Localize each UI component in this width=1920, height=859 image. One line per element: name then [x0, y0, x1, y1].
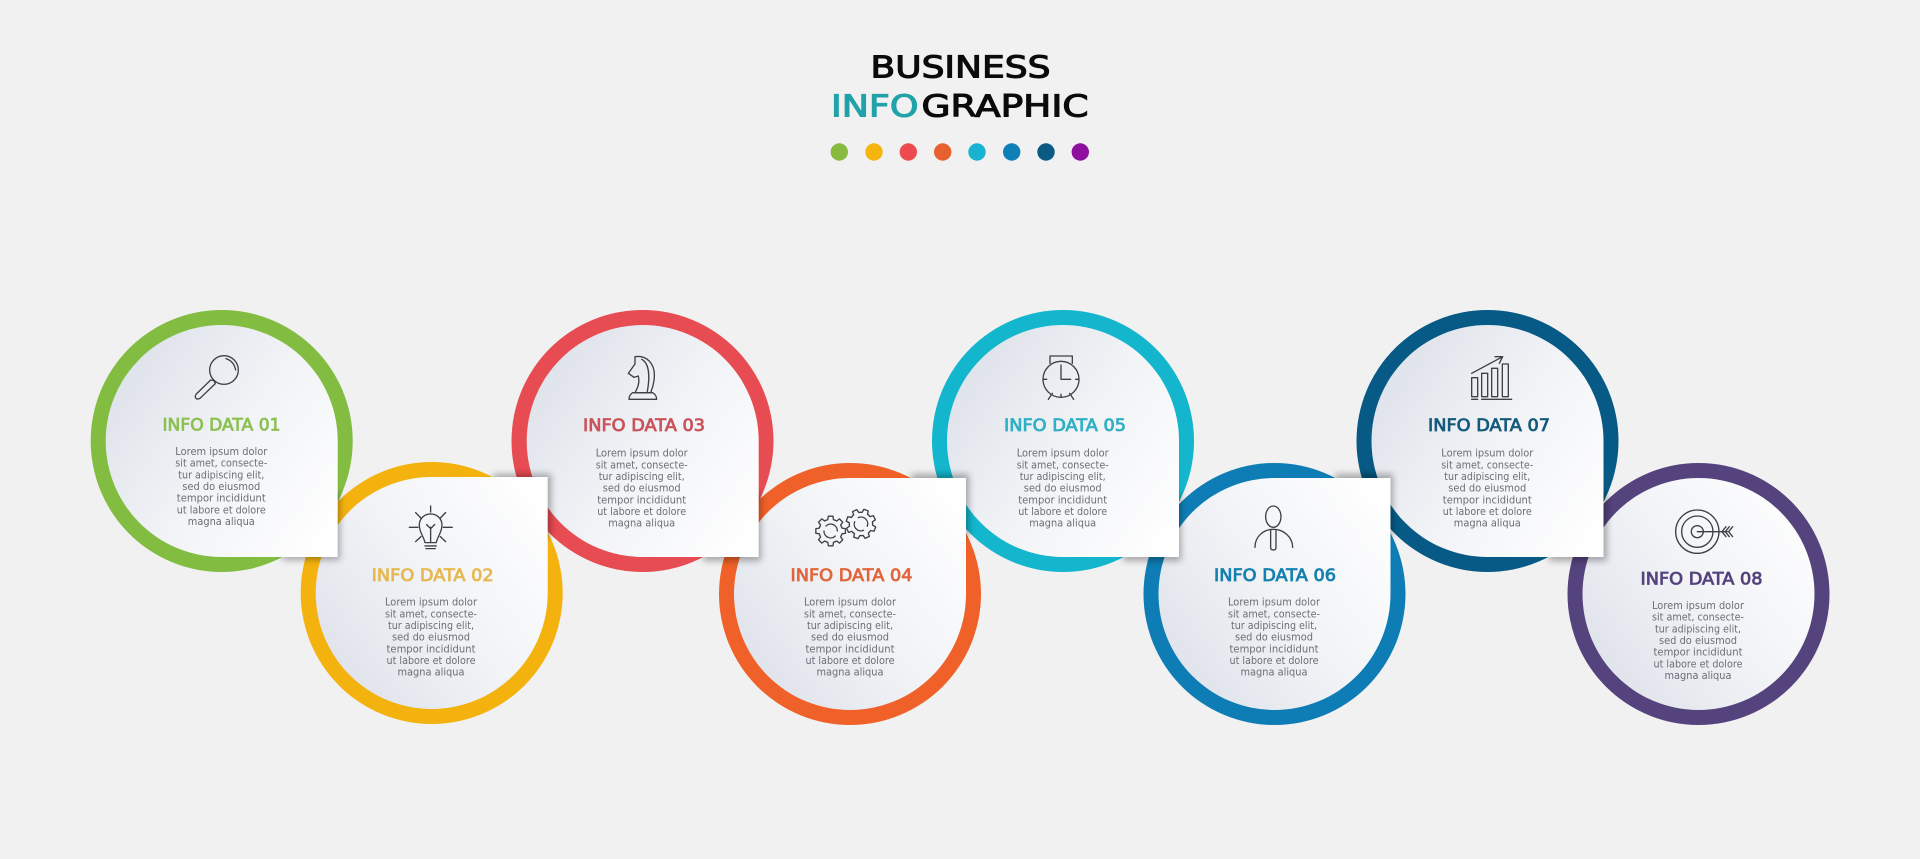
text block: Lorem ipsum dolor: [1228, 597, 1321, 609]
icon: target: [1676, 510, 1733, 553]
text block: sed do eiusmod: [182, 481, 260, 493]
text block: magna aliqua: [1029, 518, 1096, 530]
title: [831, 51, 1088, 125]
panel: info data 06: [1144, 463, 1406, 725]
panel: info data 08: [1568, 463, 1830, 725]
text block: tur adipiscing elit,: [178, 469, 264, 481]
heading: INFO DATA 02: [372, 566, 494, 586]
text block: ut labore et dolore: [1018, 506, 1107, 518]
text block: [1017, 448, 1109, 530]
icon: magnifying glass: [195, 356, 238, 399]
text block: sit amet, consecte-: [804, 608, 896, 620]
panel: info data 05: [932, 310, 1194, 572]
text block: tur adipiscing elit,: [1231, 620, 1317, 632]
text block: sed do eiusmod: [1448, 483, 1526, 495]
text block: tempor incididunt: [597, 494, 686, 506]
text block: sed do eiusmod: [811, 632, 889, 644]
text block: [596, 448, 688, 530]
text block: tur adipiscing elit,: [1020, 471, 1106, 483]
text block: magna aliqua: [1664, 670, 1732, 682]
title: BUSINESS: [870, 51, 1050, 86]
text block: sit amet, consecte-: [175, 458, 267, 470]
text block: [385, 597, 478, 679]
text block: ut labore et dolore: [177, 504, 266, 516]
text block: Lorem ipsum dolor: [1017, 448, 1109, 460]
text block: sit amet, consecte-: [1228, 608, 1320, 620]
text block: magna aliqua: [608, 518, 675, 530]
text block: ut labore et dolore: [1443, 506, 1532, 518]
text block: tempor incididunt: [806, 643, 894, 655]
panel: info data 03: [512, 310, 774, 572]
panel: info data 04: [719, 463, 981, 725]
title: INFO: [831, 90, 918, 125]
text block: magna aliqua: [816, 667, 884, 679]
icon: light bulb: [409, 506, 452, 549]
icon: alarm clock: [1043, 356, 1079, 399]
text block: Lorem ipsum dolor: [1441, 448, 1534, 460]
text block: Lorem ipsum dolor: [596, 448, 688, 460]
text block: [804, 597, 897, 679]
icon: person: [1255, 506, 1293, 550]
heading: INFO DATA 06: [1214, 566, 1336, 586]
text block: tur adipiscing elit,: [1655, 623, 1741, 635]
text block: [1441, 448, 1534, 530]
text block: sit amet, consecte-: [385, 608, 477, 620]
panel: info data 02: [301, 462, 563, 724]
title: GRAPHIC: [922, 90, 1088, 125]
text block: sit amet, consecte-: [596, 459, 688, 471]
text block: sit amet, consecte-: [1017, 459, 1109, 471]
heading: INFO DATA 08: [1640, 570, 1762, 590]
text block: tur adipiscing elit,: [388, 620, 474, 632]
icon: bar chart: [1472, 357, 1512, 399]
text block: sed do eiusmod: [1024, 483, 1102, 495]
text block: magna aliqua: [398, 667, 464, 679]
text block: sit amet, consecte-: [1652, 612, 1744, 624]
text block: ut labore et dolore: [597, 506, 686, 518]
colour dots row: [831, 143, 1089, 161]
panel: info data 07: [1356, 310, 1618, 572]
text block: sit amet, consecte-: [1441, 459, 1533, 471]
text block: tempor incididunt: [177, 493, 266, 505]
heading: INFO DATA 04: [790, 566, 912, 586]
text block: Lorem ipsum dolor: [175, 446, 268, 458]
text block: tempor incididunt: [1230, 643, 1318, 655]
text block: ut labore et dolore: [1654, 658, 1742, 670]
heading: INFO DATA 01: [162, 416, 280, 436]
text block: ut labore et dolore: [1230, 655, 1318, 667]
text block: tur adipiscing elit,: [807, 620, 893, 632]
text block: tur adipiscing elit,: [599, 471, 685, 483]
text block: [175, 446, 268, 528]
text block: sed do eiusmod: [1659, 635, 1737, 647]
text block: ut labore et dolore: [806, 655, 894, 667]
text block: sed do eiusmod: [392, 632, 470, 644]
text block: tempor incididunt: [386, 643, 476, 655]
text block: [1228, 597, 1321, 679]
text block: sed do eiusmod: [603, 483, 681, 495]
text block: magna aliqua: [188, 516, 255, 528]
text block: Lorem ipsum dolor: [804, 597, 897, 609]
icon: gears: [816, 505, 880, 546]
text block: magna aliqua: [1240, 667, 1308, 679]
text block: Lorem ipsum dolor: [1652, 600, 1745, 612]
text block: tempor incididunt: [1443, 494, 1532, 506]
text block: tur adipiscing elit,: [1444, 471, 1530, 483]
text block: [1652, 600, 1745, 682]
text block: ut labore et dolore: [386, 655, 476, 667]
text block: magna aliqua: [1454, 518, 1521, 530]
panel: info data 01: [91, 310, 353, 572]
text block: tempor incididunt: [1018, 494, 1107, 506]
icon: chess knight: [628, 356, 657, 399]
text block: sed do eiusmod: [1235, 632, 1313, 644]
text block: Lorem ipsum dolor: [385, 597, 478, 609]
heading: INFO DATA 03: [583, 416, 705, 436]
heading: INFO DATA 07: [1428, 416, 1550, 436]
heading: INFO DATA 05: [1004, 416, 1126, 436]
text block: tempor incididunt: [1654, 647, 1742, 659]
